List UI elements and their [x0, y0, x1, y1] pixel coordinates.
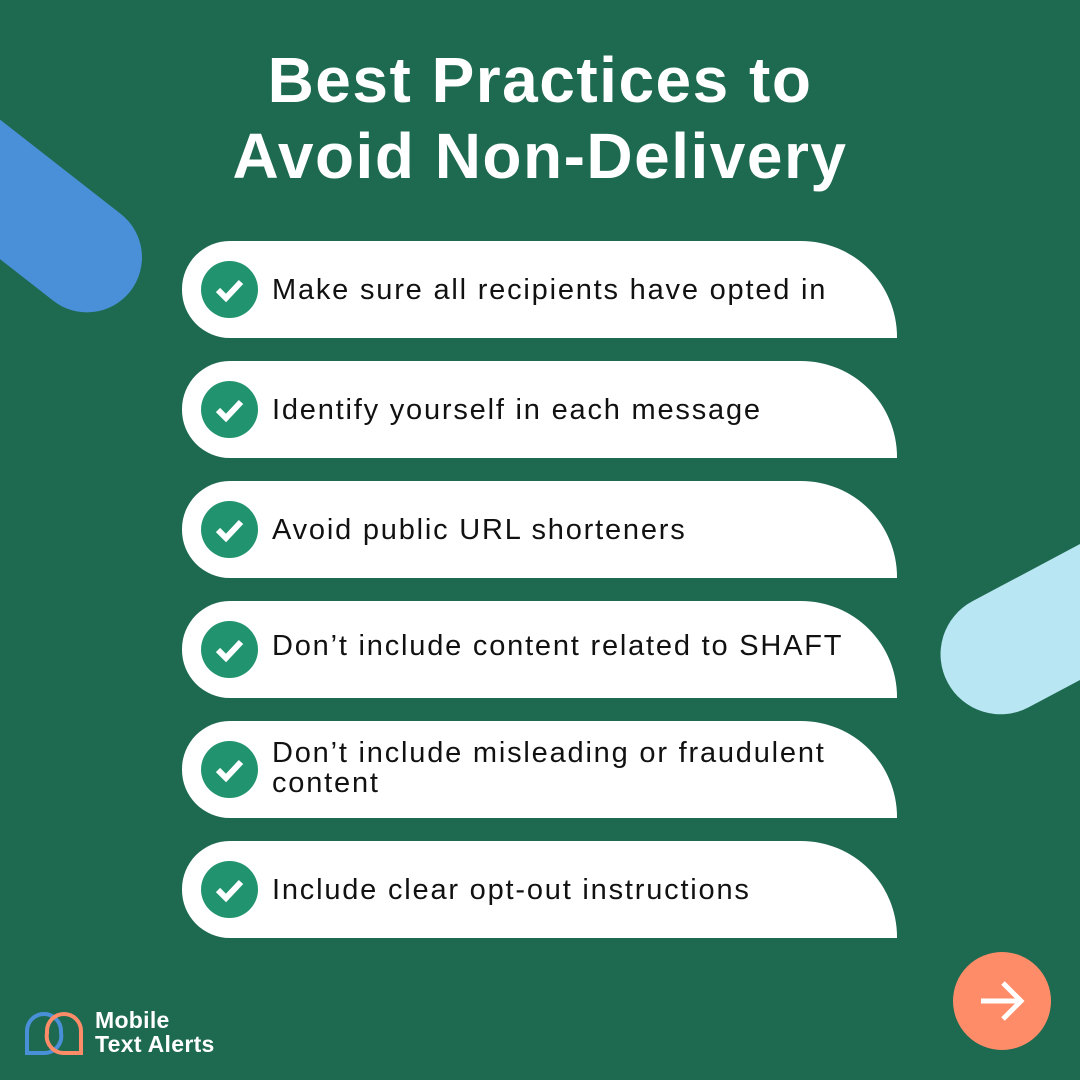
- arrow button: [953, 952, 1051, 1050]
- text: Don’t include content related to SHAFT: [272, 630, 843, 662]
- decorative shape: blue bar: [0, 75, 164, 335]
- title: Best Practices to: [268, 44, 812, 116]
- text: Identify yourself in each message: [272, 394, 762, 426]
- text: Make sure all recipients have opted in: [272, 274, 827, 306]
- title: Avoid Non-Delivery: [233, 120, 847, 192]
- logo text: [95, 1007, 215, 1057]
- logo text: Text Alerts: [95, 1031, 215, 1057]
- icon: check: [201, 261, 258, 318]
- text: Avoid public URL shorteners: [272, 514, 687, 546]
- item 6: [182, 841, 897, 938]
- item 5: [182, 721, 897, 818]
- icon: check: [201, 621, 258, 678]
- text: Don’t include misleading or fraudulent content: [272, 736, 826, 798]
- icon: check: [201, 861, 258, 918]
- title: [233, 44, 847, 192]
- item 4: [182, 601, 897, 698]
- logo: [25, 1007, 215, 1057]
- icon: logo mark: [25, 1012, 83, 1055]
- text: Include clear opt-out instructions: [272, 874, 751, 906]
- item 2: [182, 361, 897, 458]
- item 3: [182, 481, 897, 578]
- icon: check: [201, 741, 258, 798]
- logo text: Mobile: [95, 1007, 170, 1033]
- icon: check: [201, 381, 258, 438]
- item 1: [182, 241, 897, 338]
- icon: check: [201, 501, 258, 558]
- decorative shape: light blue bar: [919, 489, 1080, 735]
